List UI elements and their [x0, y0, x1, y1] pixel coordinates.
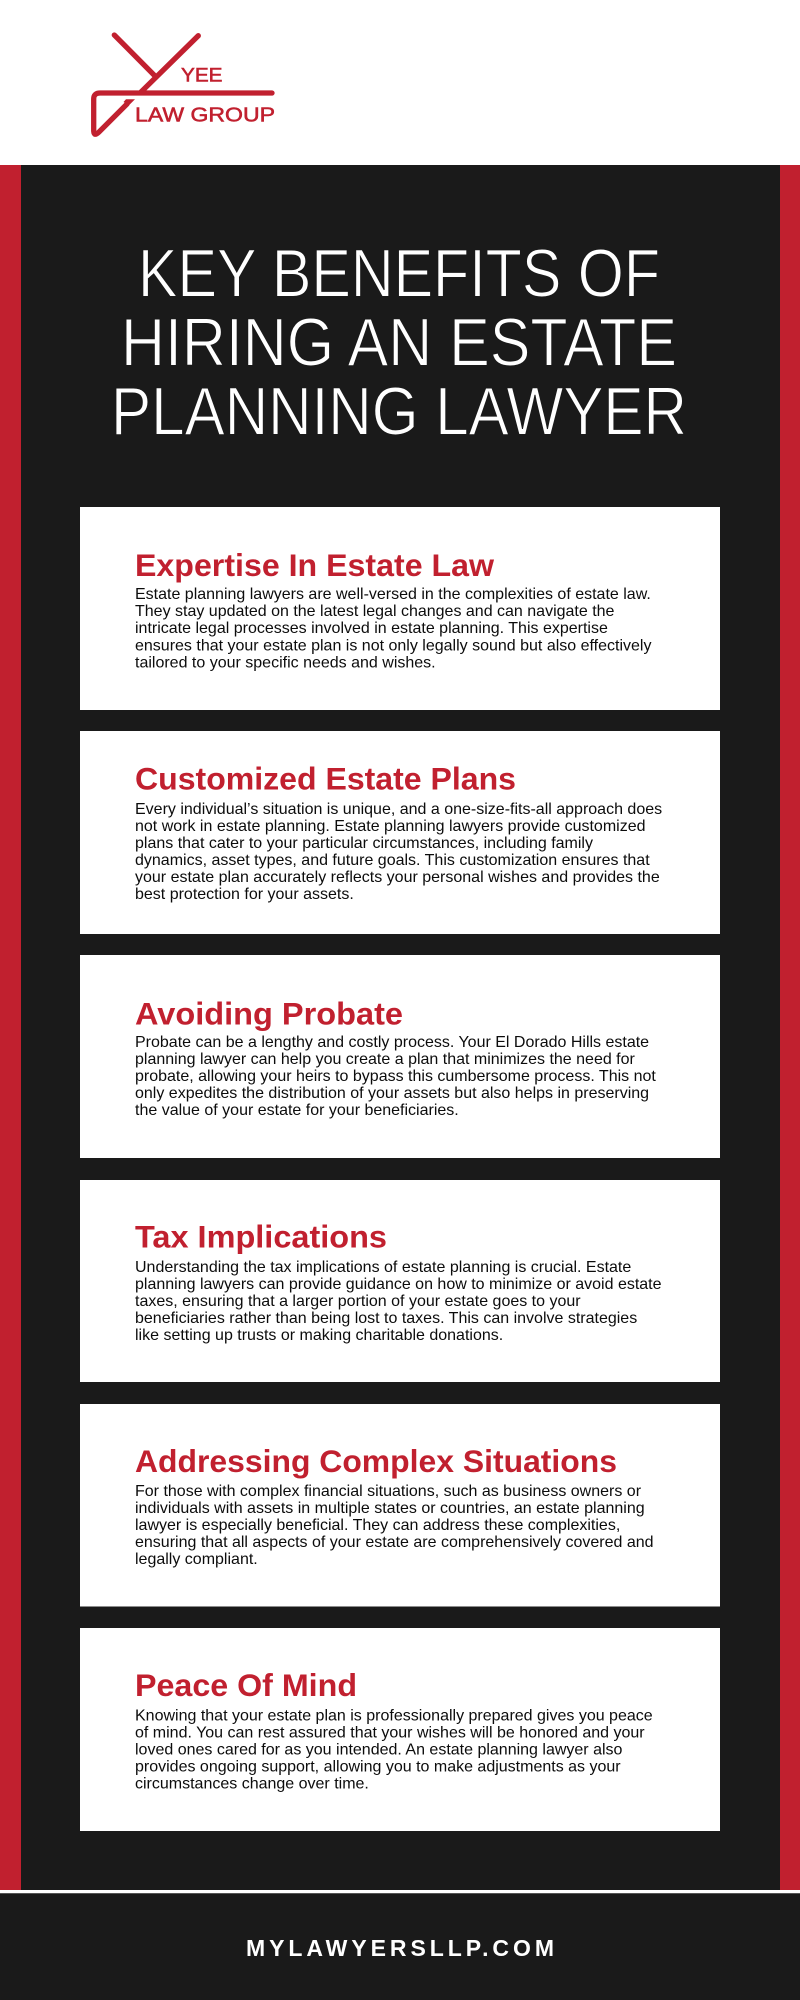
logo text: YEE: YEE	[181, 65, 222, 87]
text block: addressing complex situations: ensuring that all aspects of your estate are comprehensively covered and	[135, 1534, 654, 1551]
heading: avoiding probate: Avoiding Probate	[135, 996, 403, 1032]
text block: customized: your estate plan accurately reflects your personal wishes and provides the	[135, 869, 660, 886]
text block: expertise: They stay updated on the latest legal changes and can navigate the	[135, 603, 615, 620]
footer band	[0, 1890, 800, 2000]
text block: tax implications: like setting up trusts or making charitable donations.	[135, 1327, 503, 1344]
text block: peace of mind: provides ongoing support, allowing you to make adjustments as your	[135, 1759, 621, 1776]
text block: expertise: ensures that your estate plan is not only legally sound but also effectively	[135, 638, 651, 654]
text block: peace of mind: Knowing that your estate plan is professionally prepared gives you peace	[135, 1708, 653, 1725]
text block: expertise: Estate planning lawyers are well-versed in the complexities of estate law.	[135, 586, 651, 603]
panel: customized estate plans	[80, 731, 720, 934]
text block: customized: Every individual’s situation is unique, and a one-size-fits-all approach does	[135, 801, 662, 818]
heading: expertise: Expertise In Estate Law	[135, 547, 495, 583]
text block: tax implications: beneficiaries rather than being lost to taxes. This can involve strategies	[135, 1310, 637, 1327]
text block: expertise	[135, 586, 651, 672]
logo: Yee Law Group	[94, 35, 275, 134]
text block: peace of mind: circumstances change over time.	[135, 1776, 369, 1793]
text block: expertise: tailored to your specific needs and wishes.	[135, 654, 436, 672]
title: KEY BENEFITS OF	[138, 236, 660, 312]
text block: addressing complex situations: legally compliant.	[135, 1551, 258, 1568]
text block: customized: dynamics, asset types, and future goals. This customization ensures that	[135, 852, 650, 869]
text block: customized: not work in estate planning. Estate planning lawyers provide customized	[135, 818, 646, 835]
text block: addressing complex situations	[135, 1483, 654, 1568]
text block: addressing complex situations: lawyer is especially beneficial. They can address these complexities,	[135, 1517, 620, 1534]
text block: addressing complex situations: individuals with assets in multiple states or countries, an estate planning	[135, 1500, 645, 1517]
text block: customized: best protection for your assets.	[135, 886, 354, 903]
text block: avoiding probate: probate, allowing your heirs to bypass this cumbersome process. This not	[135, 1068, 656, 1085]
text block: peace of mind: of mind. You can rest assured that your wishes will be honored and your	[135, 1725, 645, 1742]
text block: avoiding probate: planning lawyer can help you create a plan that minimizes the need for	[135, 1051, 636, 1068]
panel: peace of mind	[80, 1628, 720, 1831]
text block: tax implications: taxes, ensuring that a larger portion of your estate goes to your	[135, 1293, 581, 1310]
text block: expertise: intricate legal processes involved in estate planning. This expertise	[135, 620, 608, 637]
text block: tax implications	[135, 1259, 662, 1344]
panel: addressing complex situations	[80, 1404, 720, 1606]
panel: tax implications	[80, 1180, 720, 1382]
text block: avoiding probate: only expedites the distribution of your assets but also helps in preserving	[135, 1085, 649, 1102]
icon: logo mark	[94, 35, 272, 134]
text block: avoiding probate	[135, 1034, 656, 1119]
header: logo band	[0, 0, 800, 165]
text block: peace of mind: loved ones cared for as you intended. An estate planning lawyer also	[135, 1742, 623, 1759]
title: HIRING AN ESTATE	[121, 304, 677, 380]
text block: customized	[135, 801, 662, 903]
text block: addressing complex situations: For those with complex financial situations, such as business owners or	[135, 1483, 642, 1500]
text block: avoiding probate: Probate can be a lengthy and costly process. Your El Dorado Hills estate	[135, 1034, 649, 1051]
text block: peace of mind	[135, 1708, 653, 1793]
logo text: LAW GROUP: LAW GROUP	[135, 104, 275, 127]
footer website: MYLAWYERSLLP.COM	[246, 1935, 554, 1961]
heading: customized: Customized Estate Plans	[135, 761, 516, 797]
left red bar	[0, 165, 21, 1890]
right red bar	[780, 165, 800, 1890]
text block: tax implications: planning lawyers can provide guidance on how to minimize or avoid estate	[135, 1276, 662, 1293]
title: PLANNING LAWYER	[111, 374, 687, 450]
heading: addressing complex situations: Addressing Complex Situations	[135, 1443, 617, 1479]
heading: peace of mind: Peace Of Mind	[135, 1667, 357, 1703]
text block: avoiding probate: the value of your estate for your beneficiaries.	[135, 1102, 459, 1119]
panel: avoiding probate	[80, 955, 720, 1158]
panel: expertise in estate law	[80, 507, 720, 710]
text block: customized: plans that cater to your particular circumstances, including family	[135, 835, 593, 852]
text block: tax implications: Understanding the tax implications of estate planning is crucial. Estate	[135, 1259, 631, 1276]
title	[111, 236, 687, 450]
heading: tax implications: Tax Implications	[135, 1218, 387, 1254]
